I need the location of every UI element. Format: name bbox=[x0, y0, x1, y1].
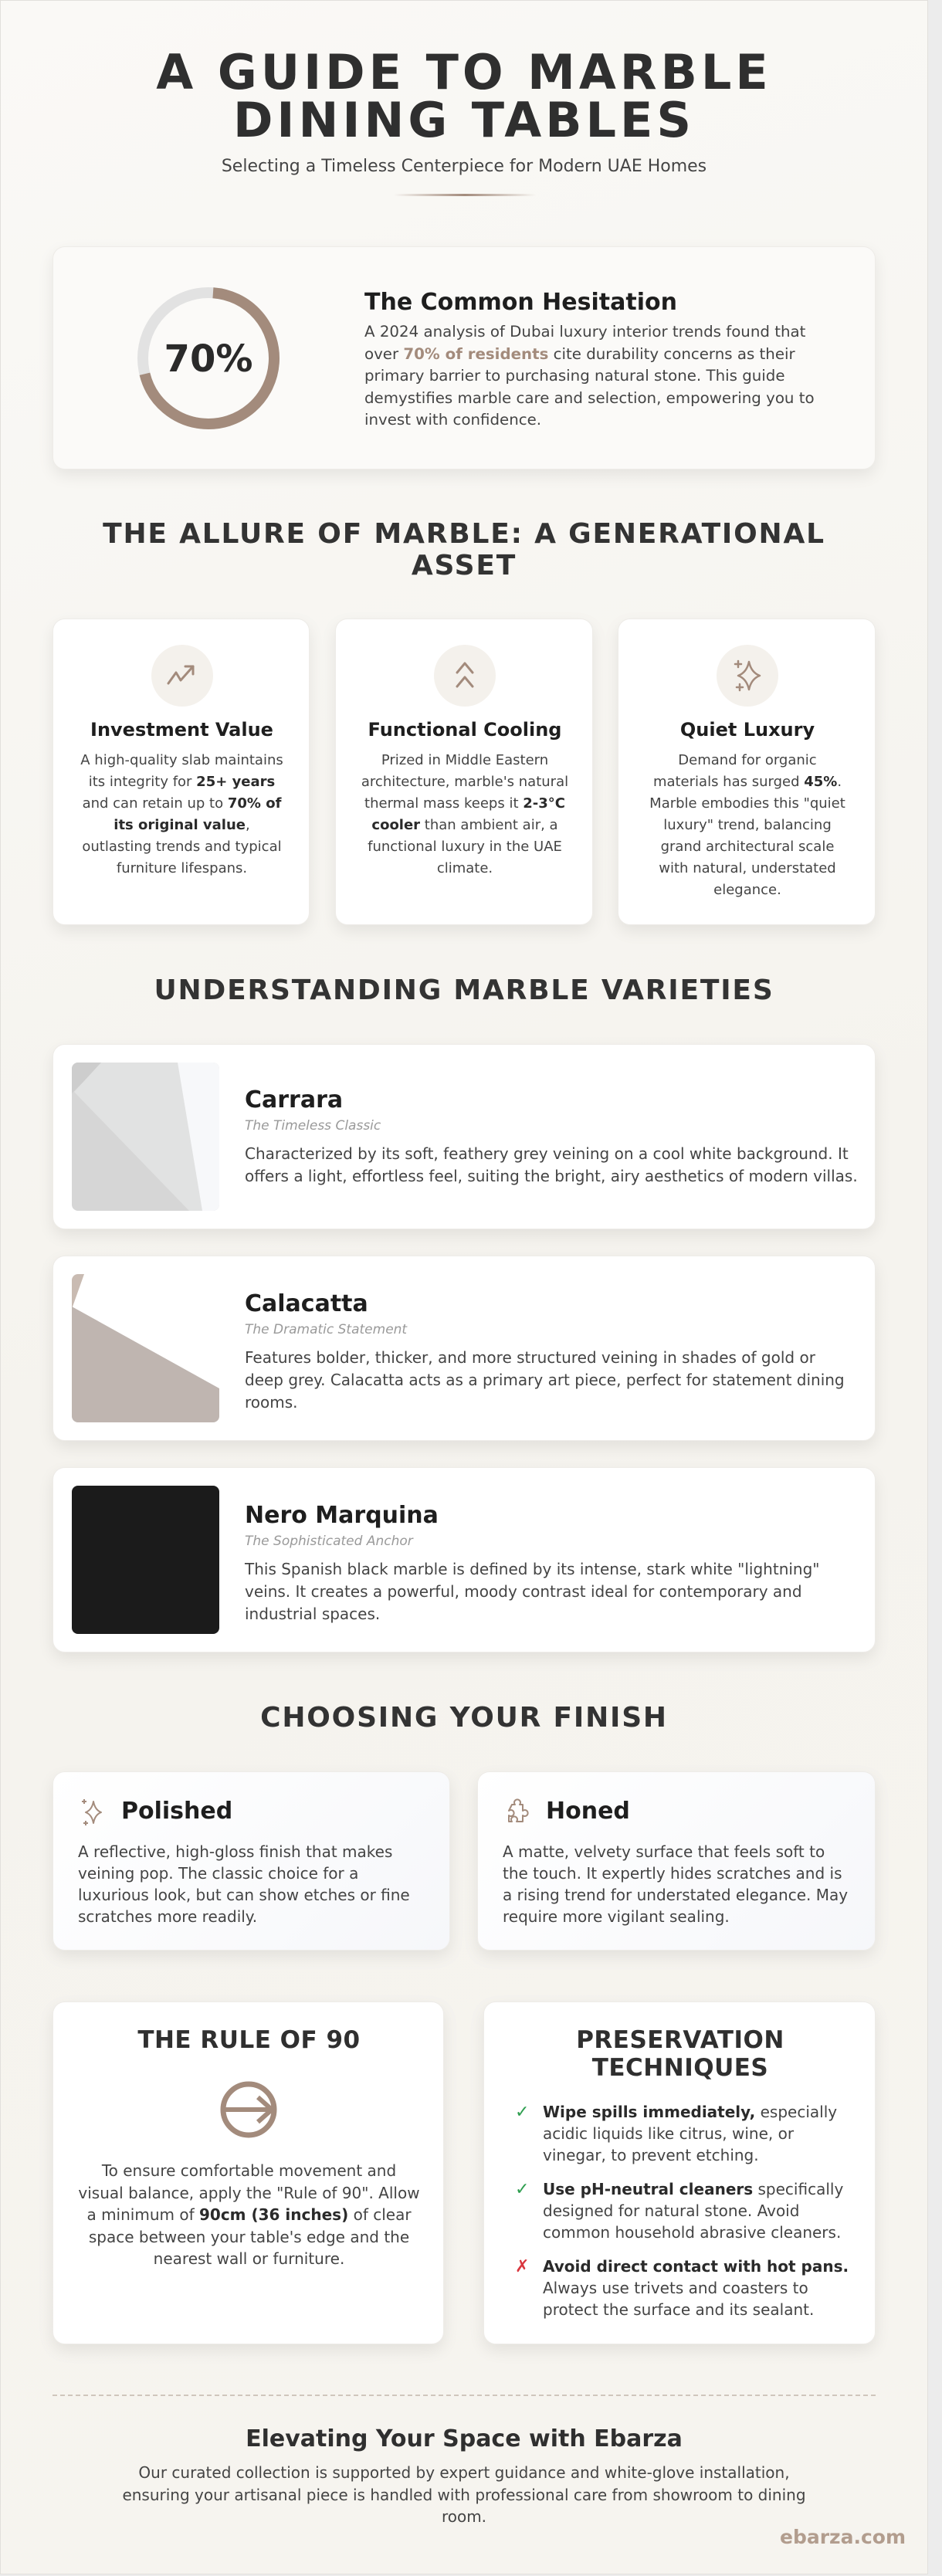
text: A reflective, high-gloss finish that makes veining pop. The classic choice for a luxurious look, but can show etches or fine scratches more readily. bbox=[78, 1842, 410, 1926]
heading: Investment Value bbox=[90, 719, 273, 741]
swatch: carrara bbox=[72, 1063, 219, 1211]
heading: allure: THE ALLURE OF MARBLE: A GENERATIONAL ASSET bbox=[103, 518, 825, 581]
heading: TECHNIQUES bbox=[592, 2054, 768, 2082]
heading bbox=[576, 2026, 784, 2082]
panel: common hesitation bbox=[53, 246, 876, 469]
chart: 70% ring: 70% bbox=[164, 337, 252, 381]
list item: wipe spills: Wipe spills immediately, especially acidic liquids like citrus, wine, or vinegar, to prevent etching. bbox=[543, 2103, 837, 2164]
divider accent bbox=[394, 194, 536, 196]
panel: carrara bbox=[53, 1044, 876, 1229]
swatch: calacatta bbox=[72, 1274, 219, 1422]
text: This Spanish black marble is defined by its intense, stark white "lightning" veins. It creates a powerful, moody contrast ideal for contemporary and industrial spaces. bbox=[245, 1560, 820, 1623]
heading: Carrara bbox=[245, 1086, 343, 1113]
subtitle: Selecting a Timeless Centerpiece for Modern UAE Homes bbox=[222, 157, 706, 176]
panel: rule of 90 bbox=[53, 2001, 444, 2344]
heading: finish: CHOOSING YOUR FINISH bbox=[260, 1702, 668, 1734]
panel: honed bbox=[477, 1771, 876, 1951]
panel: preservation techniques bbox=[483, 2001, 876, 2344]
text: Characterized by its soft, feathery grey veining on a cool white background. It offers a light, effortless feel, suiting the bright, airy aesthetics of modern villas. bbox=[245, 1144, 858, 1185]
swatch: nero bbox=[72, 1486, 219, 1634]
title: DINING TABLES bbox=[233, 92, 695, 148]
chart: 70% ring bbox=[137, 287, 280, 429]
text: A matte, velvety surface that feels soft to the touch. It expertly hides scratches and is a rising trend for understated elegance. May require more vigilant sealing. bbox=[503, 1842, 848, 1926]
heading: THE RULE OF 90 bbox=[137, 2026, 361, 2054]
title bbox=[156, 44, 772, 148]
subtitle: The Sophisticated Anchor bbox=[245, 1534, 413, 1549]
heading: Polished bbox=[121, 1798, 232, 1825]
heading: Nero Marquina bbox=[245, 1502, 439, 1529]
panel: functional cooling bbox=[335, 619, 593, 925]
panel: nero marquina bbox=[53, 1467, 876, 1652]
text: Demand for organic materials has surged 45%. Marble embodies this "quiet luxury" trend, balancing grand architectural scale with natural, understated elegance. bbox=[649, 752, 845, 898]
icon: cross: ✗ bbox=[515, 2257, 529, 2276]
heading: Quiet Luxury bbox=[680, 719, 815, 741]
icon: trending up bbox=[151, 645, 213, 707]
panel: polished bbox=[53, 1771, 450, 1951]
icon: circle arrow bbox=[221, 2082, 276, 2137]
icon: sparkles bbox=[717, 645, 778, 707]
heading: PRESERVATION bbox=[576, 2026, 784, 2054]
icon: check: ✓ bbox=[515, 2103, 529, 2122]
icon: sparkle bbox=[82, 1799, 102, 1825]
list item: hot pans: Avoid direct contact with hot pans. Always use trivets and coasters to protect the surface and its sealant. bbox=[543, 2257, 849, 2319]
text: A high-quality slab maintains its integrity for 25+ years and can retain up to 70% of its original value, outlasting trends and typical furniture lifespans. bbox=[80, 752, 283, 876]
heading: varieties: UNDERSTANDING MARBLE VARIETIES bbox=[154, 974, 774, 1006]
icon: puzzle bbox=[508, 1798, 529, 1822]
footer heading: Elevating Your Space with Ebarza bbox=[246, 2425, 683, 2452]
panel: investment value bbox=[53, 619, 310, 925]
heading: Honed bbox=[546, 1798, 630, 1825]
text: Features bolder, thicker, and more structured veining in shades of gold or deep grey. Calacatta acts as a primary art piece, perfect for statement dining rooms. bbox=[245, 1348, 845, 1412]
panel: calacatta bbox=[53, 1256, 876, 1441]
title: A GUIDE TO MARBLE bbox=[156, 44, 772, 100]
subtitle: The Timeless Classic bbox=[245, 1118, 381, 1134]
panel: quiet luxury bbox=[618, 619, 876, 925]
brand url: ebarza.com bbox=[780, 2526, 906, 2548]
subtitle: The Dramatic Statement bbox=[245, 1322, 407, 1337]
heading: Calacatta bbox=[245, 1290, 368, 1317]
heading: The Common Hesitation bbox=[364, 289, 677, 316]
text: Prized in Middle Eastern architecture, marble's natural thermal mass keeps it 2-3°C cooler than ambient air, a functional luxury in the UAE climate. bbox=[361, 752, 568, 876]
text: To ensure comfortable movement and visual balance, apply the "Rule of 90". Allow a minimum of 90cm (36 inches) of clear space between your table's edge and the nearest wall or furniture. bbox=[78, 2161, 420, 2268]
footer text: Our curated collection is supported by expert guidance and white-glove installation, ensuring your artisanal piece is handled with professional care from showroom to dining room. bbox=[122, 2463, 806, 2526]
icon: chevrons up bbox=[434, 645, 496, 707]
heading: Functional Cooling bbox=[368, 719, 561, 741]
icon: check: ✓ bbox=[515, 2180, 529, 2199]
list item: ph-neutral: Use pH-neutral cleaners specifically designed for natural stone. Avoid common household abrasive cleaners. bbox=[543, 2180, 843, 2242]
text block: A 2024 analysis of Dubai luxury interior trends found that over 70% of residents cite durability concerns as their primary barrier to purchasing natural stone. This guide demystifies marble care and selection, empowering you to invest with confidence. bbox=[364, 323, 815, 429]
